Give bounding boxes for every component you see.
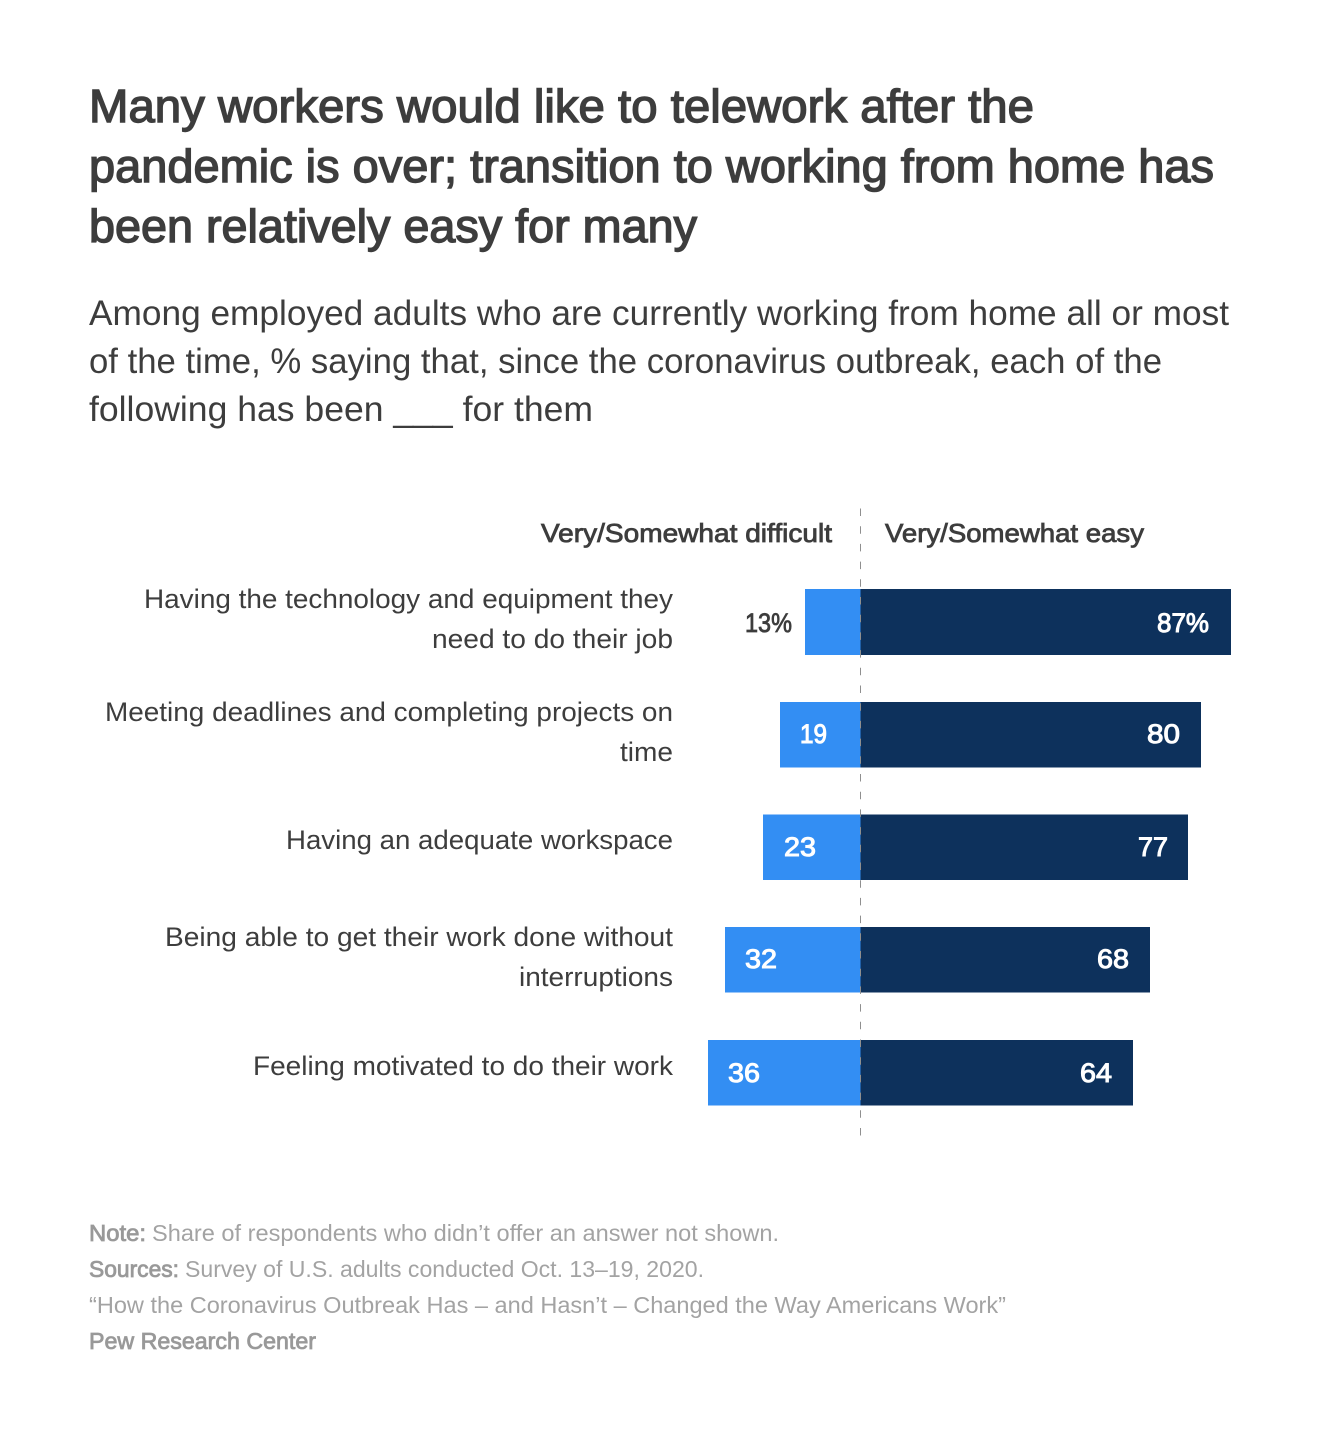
subtitle bbox=[89, 294, 1229, 429]
column heading: difficult: Very/Somewhat difficult bbox=[541, 518, 833, 548]
row labels: interruptions bbox=[519, 962, 673, 992]
subtitle: following has been ___ for them bbox=[89, 390, 593, 429]
diverging bar chart: 23 bbox=[784, 832, 816, 862]
subtitle: Among employed adults who are currently working from home all or most bbox=[89, 294, 1229, 333]
row labels: Being able to get their work done without bbox=[165, 922, 674, 952]
diverging bar chart: 64 bbox=[1080, 1058, 1112, 1088]
row labels: Having an adequate workspace bbox=[286, 825, 673, 855]
row labels: Feeling motivated to do their work bbox=[253, 1051, 674, 1081]
diverging bar chart: 87% bbox=[1157, 608, 1209, 638]
row labels: time bbox=[620, 737, 673, 767]
column heading: easy: Very/Somewhat easy bbox=[885, 518, 1144, 548]
row labels bbox=[105, 584, 674, 1081]
title: Many workers would like to telework after the bbox=[89, 80, 1034, 132]
diverging bar chart bbox=[708, 508, 1231, 1137]
footnotes bbox=[89, 1220, 1006, 1354]
footnotes: Share of respondents who didn’t offer an answer not shown. bbox=[152, 1220, 779, 1246]
footnotes: “How the Coronavirus Outbreak Has – and Hasn’t – Changed the Way Americans Work” bbox=[89, 1292, 1006, 1318]
footnotes: Survey of U.S. adults conducted Oct. 13–19, 2020. bbox=[185, 1256, 704, 1282]
footnotes: Pew Research Center bbox=[89, 1328, 316, 1354]
diverging bar chart: 77 bbox=[1138, 832, 1168, 862]
footnotes: Sources: bbox=[89, 1256, 179, 1282]
row labels: need to do their job bbox=[432, 624, 673, 654]
diverging bar chart: 13% bbox=[745, 608, 792, 638]
subtitle: of the time, % saying that, since the coronavirus outbreak, each of the bbox=[89, 342, 1162, 381]
diverging bar chart: 36 bbox=[728, 1058, 760, 1088]
title bbox=[89, 80, 1214, 252]
row labels: Having the technology and equipment they bbox=[144, 584, 674, 614]
diverging bar chart: 19 bbox=[800, 719, 827, 749]
footnotes: Note: bbox=[89, 1220, 146, 1246]
diverging bar chart: 68 bbox=[1097, 944, 1129, 974]
diverging bar chart: 32 bbox=[745, 944, 777, 974]
title: pandemic is over; transition to working from home has bbox=[89, 140, 1214, 192]
row labels: Meeting deadlines and completing projects on bbox=[105, 697, 673, 727]
diverging bar chart: 80 bbox=[1147, 719, 1180, 749]
title: been relatively easy for many bbox=[89, 200, 697, 252]
